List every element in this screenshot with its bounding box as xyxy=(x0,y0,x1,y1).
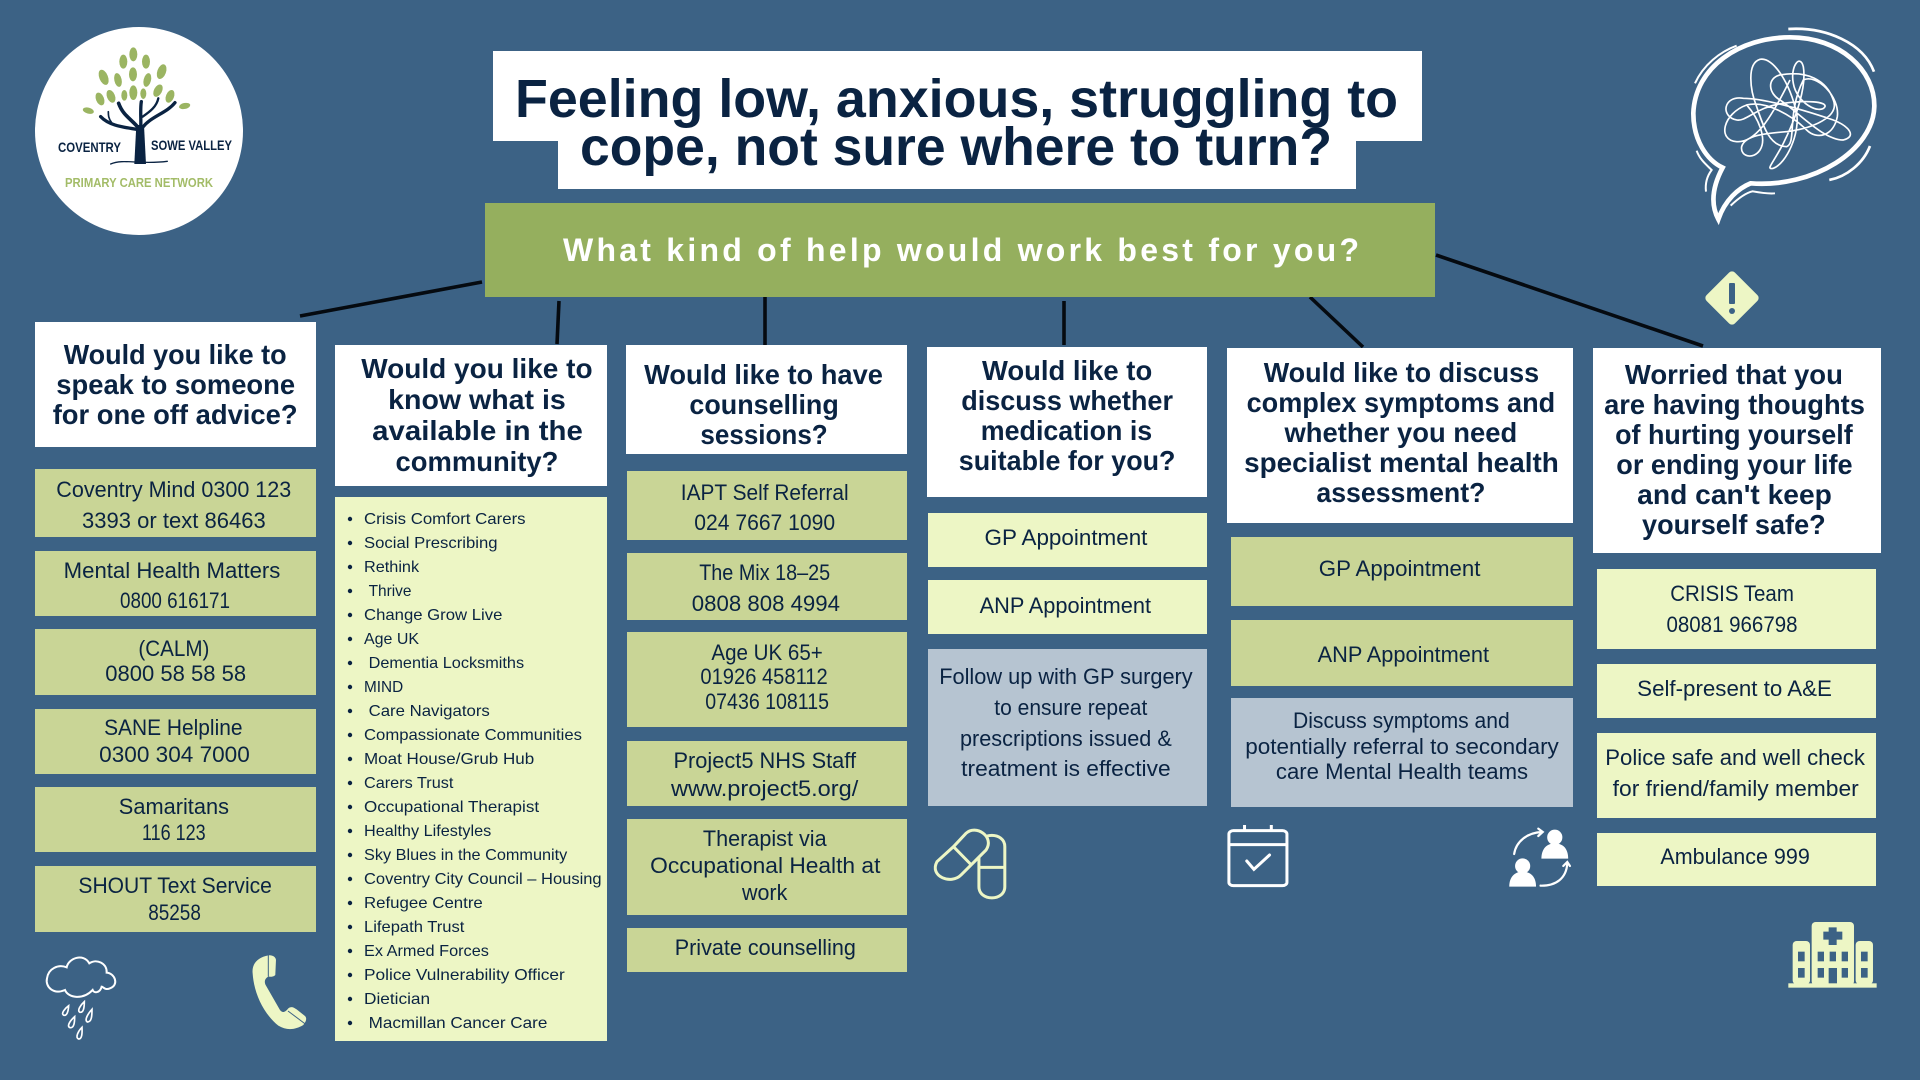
services: urgent help: 08081 966798 xyxy=(1666,612,1798,637)
heading: counselling xyxy=(626,345,907,454)
column 4: medication xyxy=(927,347,1207,806)
banner: what kind of help: What kind of help would work best for you? xyxy=(563,232,1359,268)
services: one off advice: 0800 616171 xyxy=(120,588,230,613)
list: community services: Social Prescribing xyxy=(364,535,498,552)
services: one off advice: 85258 xyxy=(148,900,201,925)
heading: specialist assessment xyxy=(1227,348,1573,523)
heading: counselling: counselling xyxy=(689,389,839,420)
heading: specialist assessment: assessment? xyxy=(1316,477,1485,508)
heading: urgent help: and can't keep xyxy=(1637,479,1832,510)
heading: specialist assessment: whether you need xyxy=(1284,417,1517,448)
heading: medication: discuss whether xyxy=(961,385,1173,416)
heading: community: available in the xyxy=(372,415,583,446)
logo: Coventry Sowe Valley Primary Care Network: PRIMARY CARE NETWORK xyxy=(65,175,214,190)
services: one off advice: 3393 or text 86463 xyxy=(82,508,266,533)
logo: Coventry Sowe Valley Primary Care Network: SOWE VALLEY xyxy=(151,137,233,153)
title: Feeling low, anxious, struggling to xyxy=(515,69,1398,129)
services: medication: treatment is effective xyxy=(961,756,1171,781)
list: community services: Occupational Therapist xyxy=(364,799,540,816)
services: specialist assessment: care Mental Health teams xyxy=(1276,759,1528,784)
list: community services: MIND xyxy=(364,679,403,696)
heading: one off advice: speak to someone xyxy=(56,369,295,400)
banner: what kind of help xyxy=(485,203,1435,297)
services: urgent help: Police safe and well check xyxy=(1605,745,1866,770)
icon: hospital xyxy=(1788,922,1877,988)
services: urgent help xyxy=(1597,569,1876,886)
icon: warning diamond xyxy=(1704,270,1760,326)
list: community services: Change Grow Live xyxy=(364,607,503,624)
services: counselling: Therapist via xyxy=(703,826,827,851)
icon: people referral arrows xyxy=(1509,829,1570,887)
services: counselling: 0808 808 4994 xyxy=(692,591,840,616)
services: counselling xyxy=(627,471,907,972)
heading: community: community? xyxy=(396,446,558,477)
heading: urgent help: of hurting yourself xyxy=(1615,419,1853,450)
icon: calendar with check xyxy=(1229,825,1287,886)
heading: counselling: Would like to have xyxy=(644,359,883,390)
column 3: counselling sessions xyxy=(626,345,907,972)
services: one off advice: Samaritans xyxy=(119,794,229,819)
services: one off advice: SANE Helpline xyxy=(104,715,242,740)
list: community services: Sky Blues in the Community xyxy=(364,847,567,864)
services: medication: GP Appointment xyxy=(984,525,1147,550)
services: medication: prescriptions issued & xyxy=(960,726,1172,751)
list: community services: Age UK xyxy=(364,631,419,648)
services: medication: ANP Appointment xyxy=(980,593,1151,618)
list: community services: Carers Trust xyxy=(364,775,454,792)
list: community services: Crisis Comfort Carers xyxy=(364,511,526,528)
icon: rain cloud xyxy=(47,958,115,1039)
logo: Coventry Sowe Valley Primary Care Network: COVENTRY xyxy=(58,139,122,155)
title: cope, not sure where to turn? xyxy=(580,117,1332,177)
services: counselling: Age UK 65+ xyxy=(711,640,823,665)
services: counselling: 01926 458112 xyxy=(700,664,828,689)
icon: pills xyxy=(935,830,1005,898)
services: one off advice: 116 123 xyxy=(142,820,206,845)
list: community services: Police Vulnerability Officer xyxy=(364,967,566,984)
title xyxy=(493,51,1422,189)
services: specialist assessment xyxy=(1231,537,1573,807)
heading: specialist assessment: Would like to discuss xyxy=(1264,357,1539,388)
list: community services: Lifepath Trust xyxy=(364,919,465,936)
services: specialist assessment: ANP Appointment xyxy=(1318,642,1489,667)
services: counselling: www.project5.org/ xyxy=(670,776,859,801)
heading: medication: Would like to xyxy=(982,355,1152,386)
list: community services: Healthy Lifestyles xyxy=(364,823,491,840)
services: specialist assessment: Discuss symptoms and xyxy=(1293,708,1510,733)
services: one off advice: 0800 58 58 58 xyxy=(105,661,246,686)
heading: one off advice xyxy=(35,322,316,447)
list: community services: Care Navigators xyxy=(369,703,490,720)
services: counselling: The Mix 18–25 xyxy=(699,560,830,585)
list: community services: Coventry City Council – Housing xyxy=(364,871,602,888)
list: community services: Ex Armed Forces xyxy=(364,943,489,960)
services: medication: to ensure repeat xyxy=(994,695,1147,720)
list: community services: Thrive xyxy=(369,583,412,600)
services: specialist assessment: GP Appointment xyxy=(1319,556,1480,581)
list: community services: Moat House/Grub Hub xyxy=(364,751,534,768)
column 5: specialist assessment xyxy=(1227,348,1573,807)
list: community services: Refugee Centre xyxy=(364,895,483,912)
services: counselling: Occupational Health at xyxy=(650,853,880,878)
heading: urgent help: yourself safe? xyxy=(1642,509,1826,540)
column 6: urgent help xyxy=(1593,348,1881,886)
heading: medication xyxy=(927,347,1207,497)
services: one off advice: 0300 304 7000 xyxy=(99,742,250,767)
heading: one off advice: Would you like to xyxy=(64,339,287,370)
list: community services: Dietician xyxy=(364,991,430,1008)
heading: specialist assessment: specialist mental health xyxy=(1244,447,1559,478)
services: counselling: 024 7667 1090 xyxy=(694,510,835,535)
heading: urgent help xyxy=(1593,348,1881,553)
heading: urgent help: are having thoughts xyxy=(1604,389,1865,420)
services: one off advice: Coventry Mind 0300 123 xyxy=(56,477,291,502)
heading: counselling: sessions? xyxy=(700,419,828,450)
heading: medication: suitable for you? xyxy=(959,445,1176,476)
services: one off advice: SHOUT Text Service xyxy=(78,873,272,898)
services: medication xyxy=(928,513,1207,806)
list: community services xyxy=(335,497,607,1041)
services: one off advice: (CALM) xyxy=(138,636,209,661)
heading: urgent help: Worried that you xyxy=(1625,359,1843,390)
services: medication: Follow up with GP surgery xyxy=(939,664,1193,689)
services: urgent help: Ambulance 999 xyxy=(1660,844,1810,869)
logo: Coventry Sowe Valley Primary Care Network xyxy=(35,27,243,235)
heading: community: know what is xyxy=(388,384,566,415)
services: urgent help: Self-present to A&E xyxy=(1637,676,1832,701)
services: one off advice: Mental Health Matters xyxy=(64,558,280,583)
services: counselling: 07436 108115 xyxy=(705,689,829,714)
list: community services: Macmillan Cancer Care xyxy=(369,1015,548,1032)
heading: medication: medication is xyxy=(981,415,1152,446)
list: community services: Rethink xyxy=(364,559,420,576)
heading: specialist assessment: complex symptoms and xyxy=(1247,387,1555,418)
column 1: one off advice xyxy=(35,322,316,932)
heading: community xyxy=(335,345,607,486)
services: urgent help: for friend/family member xyxy=(1613,776,1859,801)
services: counselling: work xyxy=(741,880,788,905)
services: counselling: Private counselling xyxy=(675,935,856,960)
services: counselling: Project5 NHS Staff xyxy=(674,748,857,773)
list: community services: Dementia Locksmiths xyxy=(369,655,524,672)
services: urgent help: CRISIS Team xyxy=(1670,581,1794,606)
services: one off advice xyxy=(35,469,316,932)
icon: tangled thought bubble xyxy=(1693,29,1874,219)
services: counselling: IAPT Self Referral xyxy=(681,480,849,505)
connector lines xyxy=(300,255,1703,347)
list: community services: Compassionate Communities xyxy=(364,727,582,744)
services: specialist assessment: potentially referral to secondary xyxy=(1245,734,1559,759)
column 2: what is available in the community xyxy=(335,345,607,1041)
icon: telephone xyxy=(253,955,306,1029)
heading: one off advice: for one off advice? xyxy=(53,399,298,430)
heading: community: Would you like to xyxy=(361,353,593,384)
heading: urgent help: or ending your life xyxy=(1616,449,1853,480)
